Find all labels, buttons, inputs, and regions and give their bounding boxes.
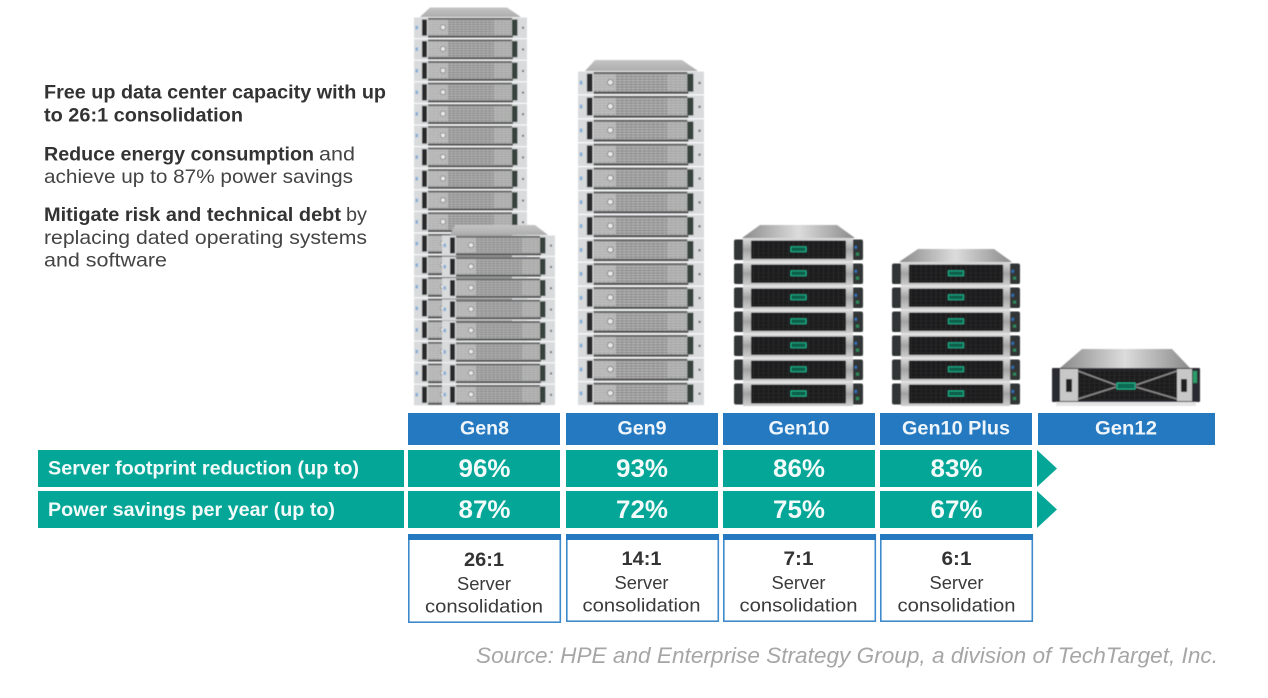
benefit: risk: replacing dated operating systems: [44, 227, 367, 249]
row label: power: [38, 491, 404, 528]
benefit: risk: by: [346, 204, 367, 226]
header: Gen10: Gen10: [768, 418, 830, 440]
Gen9 footprint value: 93%: [616, 455, 668, 483]
header: Gen9: Gen9: [618, 418, 666, 440]
benefit: risk: Mitigate risk and technical debt: [44, 204, 342, 226]
Gen10 power value: 75%: [773, 496, 825, 524]
header: Gen9: [566, 413, 718, 445]
intro text: key benefits: [44, 82, 386, 272]
header: Gen8: [408, 413, 560, 445]
consolidation box: Gen9: [566, 534, 719, 621]
Gen9 power value: 72%: [616, 496, 668, 524]
benefit: energy: achieve up to 87% power savings: [44, 166, 353, 188]
header: Gen8: Gen8: [460, 418, 509, 440]
consolidation box: Gen10: consolidation: [740, 594, 858, 616]
arrow: power to Gen12: [1037, 491, 1057, 528]
consolidation box: Gen9: consolidation: [582, 594, 700, 616]
consolidation box: Gen10 Plus: 6:1: [942, 548, 972, 570]
header: Gen10 Plus: Gen10 Plus: [902, 418, 1010, 440]
Gen8 power value: 87%: [458, 496, 510, 524]
Gen9 footprint value: [566, 450, 718, 487]
consolidation box: Gen10: 7:1: [784, 548, 814, 570]
consolidation box: Gen8: [408, 534, 561, 622]
header: Gen12: Gen12: [1095, 418, 1157, 440]
Gen10 footprint value: 86%: [773, 455, 825, 483]
consolidation box: Gen10 Plus: Server: [930, 572, 984, 593]
benefit: capacity: [44, 82, 386, 126]
benefit: energy: Reduce energy consumption: [44, 144, 314, 166]
consolidation box: Gen9: 14:1: [622, 548, 662, 570]
Gen10 Plus footprint value: 83%: [930, 455, 982, 483]
Gen10 power value: [723, 491, 875, 528]
Gen8 footprint value: [408, 450, 560, 487]
icon: Gen8 server stack: [414, 8, 555, 405]
benefit: energy: and: [319, 144, 355, 166]
benefit: capacity: to 26:1 consolidation: [44, 104, 243, 126]
benefit: capacity: Free up data center capacity with up: [44, 82, 386, 104]
arrow: footprint to Gen12: [1037, 450, 1057, 487]
consolidation box: Gen8: consolidation: [425, 596, 543, 616]
row label: footprint: [38, 450, 404, 487]
header: Gen12: [1038, 413, 1215, 445]
consolidation box: Gen10: Server: [772, 572, 826, 593]
consolidation box: Gen10 Plus: consolidation: [898, 594, 1016, 616]
header: Gen10 Plus: [880, 413, 1032, 445]
consolidation box: Gen9: Server: [614, 572, 668, 593]
icon: Gen9 server stack: [578, 60, 704, 405]
benefit: energy: [44, 144, 355, 188]
consolidation box: Gen10 Plus: [880, 534, 1033, 621]
icon: Gen12 server: [1052, 349, 1200, 406]
Gen10 Plus power value: [880, 491, 1032, 528]
Gen8 footprint value: 96%: [458, 455, 510, 483]
benefit: risk: [44, 204, 367, 272]
consolidation box: Gen10: [723, 534, 876, 621]
row: server footprint reduction: [38, 450, 1057, 487]
benefit: risk: and software: [44, 250, 167, 272]
icon: Gen10 Plus server stack: [892, 249, 1020, 406]
consolidation box: Gen8: Server: [457, 573, 511, 594]
Gen10 Plus power value: 67%: [930, 496, 982, 524]
row label: footprint: Server footprint reduction (up to): [48, 458, 359, 480]
icon: Gen10 server stack: [734, 225, 863, 406]
Gen9 power value: [566, 491, 718, 528]
source note: Source: HPE and Enterprise Strategy Group, a division of TechTarget, Inc.: [476, 643, 1218, 668]
Gen10 Plus footprint value: [880, 450, 1032, 487]
Gen10 footprint value: [723, 450, 875, 487]
row label: power: Power savings per year (up to): [48, 499, 335, 521]
row: power savings per year: [38, 491, 1057, 528]
Gen8 power value: [408, 491, 560, 528]
consolidation box: Gen8: 26:1: [464, 549, 504, 571]
header: Gen10: [723, 413, 875, 445]
